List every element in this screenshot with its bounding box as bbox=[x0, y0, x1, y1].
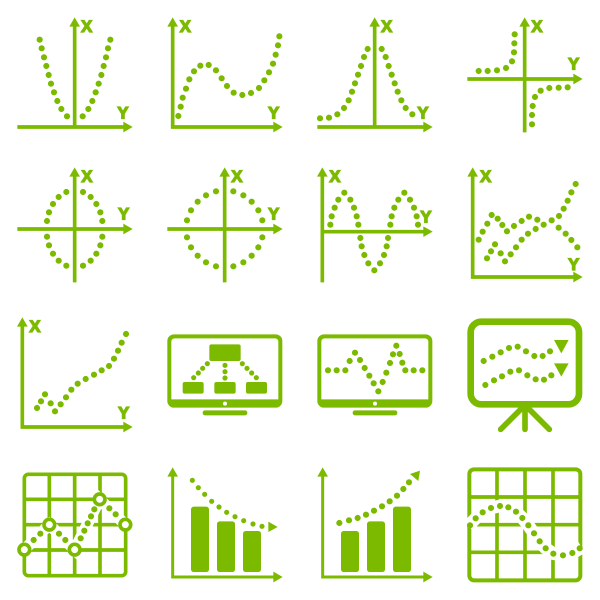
monitor stand bbox=[203, 410, 247, 415]
axis label X: X bbox=[81, 167, 93, 186]
icon: falling bar chart bbox=[167, 467, 283, 582]
dotted curve bbox=[320, 49, 412, 118]
icon: rising bar chart bbox=[317, 467, 433, 582]
icon: monitor with hierarchy bbox=[167, 334, 282, 415]
axis label Y: Y bbox=[420, 207, 432, 226]
dotted trend bbox=[339, 482, 409, 523]
axis label X: X bbox=[531, 17, 543, 36]
dotted segments bbox=[34, 508, 116, 540]
axis label Y: Y bbox=[268, 104, 279, 123]
grid bbox=[469, 469, 580, 580]
axis label X: X bbox=[180, 17, 191, 36]
icon: grid with marker line chart bbox=[19, 474, 131, 576]
grid bbox=[24, 474, 126, 576]
open circle markers bbox=[19, 494, 131, 555]
trend arrowhead bbox=[410, 471, 420, 481]
icon: rising trend plot bbox=[17, 317, 133, 432]
white wave halo bbox=[468, 506, 582, 555]
icon: bell curve plot bbox=[317, 17, 433, 132]
board frame bbox=[471, 322, 579, 404]
axes bbox=[17, 317, 133, 432]
axes bbox=[167, 467, 283, 582]
dotted curve bbox=[40, 40, 110, 116]
icon: hyperbola plot bbox=[467, 17, 583, 132]
axis label Y: Y bbox=[268, 204, 279, 223]
hierarchy boxes bbox=[183, 344, 267, 394]
bars bbox=[191, 507, 261, 572]
axis label Y: Y bbox=[118, 204, 129, 223]
axes bbox=[167, 17, 283, 132]
axis label Y: Y bbox=[568, 54, 579, 73]
power light bbox=[373, 402, 377, 406]
axes bbox=[167, 167, 283, 282]
dotted curve bbox=[178, 36, 279, 116]
axis label X: X bbox=[231, 167, 243, 186]
dotted wave bbox=[330, 193, 418, 270]
board legs bbox=[501, 408, 549, 429]
dotted trend bbox=[192, 480, 262, 526]
axes bbox=[17, 17, 133, 132]
dotted curve bbox=[479, 34, 568, 124]
dotted circle bbox=[187, 191, 262, 266]
dotted curves bbox=[479, 184, 577, 261]
power light bbox=[223, 402, 227, 406]
axis label X: X bbox=[29, 317, 41, 336]
dotted graph bbox=[328, 346, 422, 391]
monitor body bbox=[317, 334, 432, 408]
icon: vertical ellipse plot bbox=[17, 167, 133, 282]
icon: monitor with dotted line graph bbox=[317, 334, 432, 415]
axis label X: X bbox=[480, 167, 491, 186]
axes bbox=[317, 467, 433, 582]
icon: sine wave plot bbox=[317, 167, 433, 282]
monitor body bbox=[167, 334, 282, 408]
axes bbox=[317, 167, 433, 282]
trend arrowhead bbox=[268, 522, 278, 532]
white line halo bbox=[24, 499, 125, 550]
axes bbox=[17, 167, 133, 282]
dotted curve bbox=[37, 334, 126, 411]
dotted trends bbox=[484, 347, 551, 385]
axis label Y: Y bbox=[117, 104, 129, 123]
dotted ellipse bbox=[47, 192, 102, 266]
axis label Y: Y bbox=[118, 404, 129, 423]
trend arrowheads bbox=[554, 340, 569, 377]
icon: presentation board bbox=[471, 322, 579, 429]
dotted connectors bbox=[194, 364, 256, 378]
icon: two crossing curves plot bbox=[467, 167, 583, 282]
bars bbox=[341, 507, 411, 572]
axis label X: X bbox=[329, 167, 341, 186]
axis label X: X bbox=[81, 17, 92, 36]
icon: parabola plot bbox=[17, 17, 133, 132]
axis label X: X bbox=[381, 17, 392, 36]
axes bbox=[317, 17, 433, 132]
icon: polynomial curve plot bbox=[167, 17, 283, 132]
axes bbox=[467, 167, 583, 282]
icon: circle plot bbox=[167, 167, 283, 282]
axis label Y: Y bbox=[417, 104, 429, 123]
axis label Y: Y bbox=[568, 255, 579, 274]
icon: grid with dotted wave bbox=[468, 469, 582, 580]
dotted wave bbox=[470, 506, 580, 555]
axes bbox=[467, 17, 583, 132]
monitor stand bbox=[353, 410, 397, 415]
